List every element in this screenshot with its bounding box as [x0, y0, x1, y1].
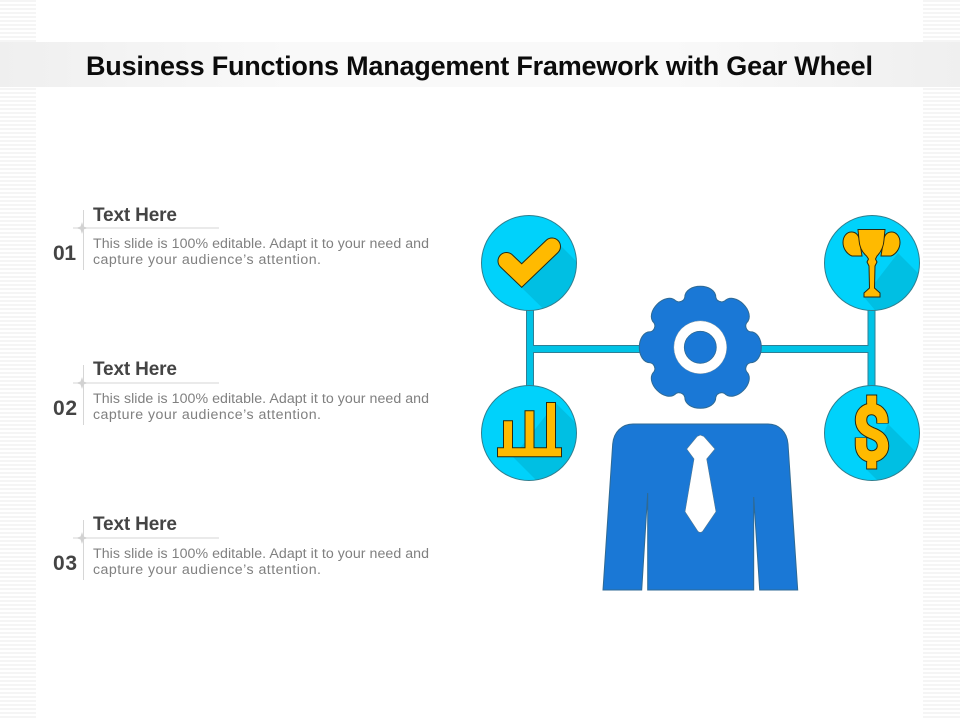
- text block 03: 03: [53, 552, 77, 575]
- icon: bar chart circle: [481, 385, 577, 481]
- text block 03: capture your audience’s attention.: [93, 562, 321, 578]
- text block 02: This slide is 100% editable. Adapt it to your need and: [93, 391, 429, 407]
- icon: gear wheel: [639, 286, 761, 408]
- text block 02: 02: [53, 397, 77, 420]
- text block 01: capture your audience’s attention.: [93, 252, 321, 268]
- text block 01: Text Here: [93, 205, 177, 226]
- connector lines: [526, 300, 875, 395]
- icon: check mark circle: [481, 215, 577, 311]
- text block 02: [53, 359, 429, 425]
- icon: dollar circle: [824, 385, 920, 481]
- title banner: [0, 42, 960, 87]
- text block 01: This slide is 100% editable. Adapt it to your need and: [93, 236, 429, 252]
- text block 02: capture your audience’s attention.: [93, 407, 321, 423]
- text block 03: Text Here: [93, 514, 177, 535]
- text block 03: [53, 514, 429, 580]
- title: Business Functions Management Framework with Gear Wheel: [86, 51, 873, 81]
- text block 02: Text Here: [93, 359, 177, 380]
- text block 03: This slide is 100% editable. Adapt it to your need and: [93, 546, 429, 562]
- tie: [685, 435, 716, 532]
- icon: person in suit: [603, 424, 798, 590]
- text block 01: [53, 205, 429, 270]
- icon: trophy circle: [824, 215, 920, 311]
- text block 01: 01: [53, 242, 76, 265]
